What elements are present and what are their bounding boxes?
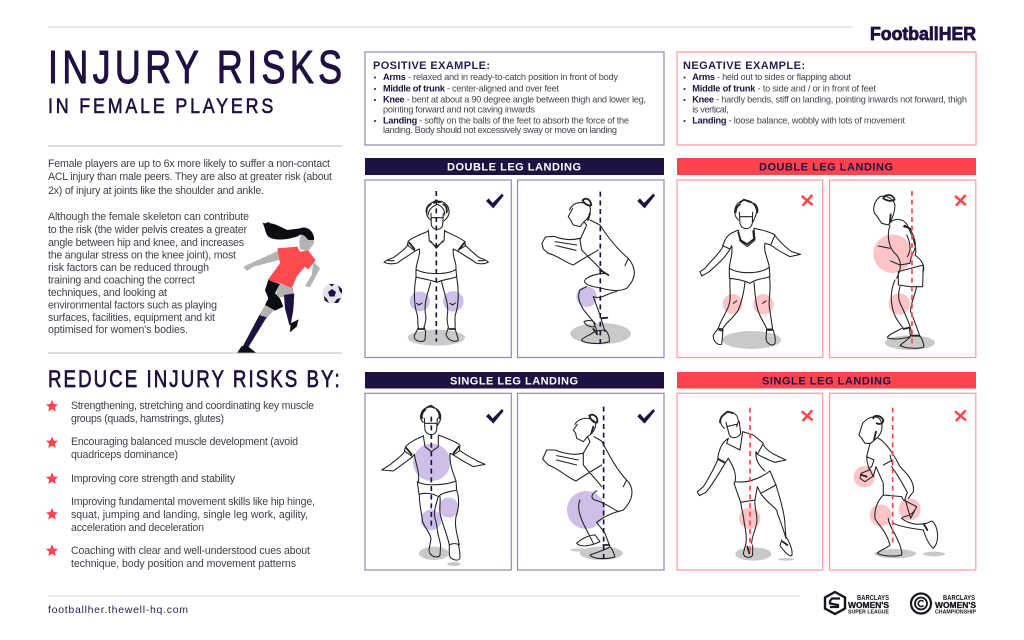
title: IN FEMALE PLAYERS — [48, 95, 273, 118]
logo: Barclays Women's Super League — [825, 592, 889, 616]
logo: Barclays Women's Championship: WOMEN'S — [935, 600, 976, 610]
heading: reduce injury risks: REDUCE INJURY RISKS BY: — [48, 366, 340, 393]
list: reduce injury risks: Improving fundamental movement skills like hip hinge, — [71, 496, 315, 508]
logo: Barclays Women's Championship — [911, 594, 976, 616]
title: INJURY RISKS — [48, 42, 342, 93]
title — [48, 42, 342, 118]
banner: double leg landing negative — [677, 158, 976, 175]
logo: Barclays Women's Super League: WOMEN'S — [848, 600, 889, 610]
intro text block: 2x) of injury at joints like the shoulder and ankle. — [48, 185, 264, 197]
icon: football — [322, 284, 342, 304]
logo: Barclays Women's Super League: BARCLAYS — [857, 595, 889, 602]
list: reduce injury risks — [46, 400, 315, 570]
list: reduce injury risks: Coaching with clear and well-understood cues about — [71, 545, 310, 557]
banner: double leg landing positive — [365, 158, 664, 175]
banner: single leg landing positive: SINGLE LEG LANDING — [450, 375, 578, 387]
panel: single leg front positive — [365, 393, 511, 570]
panel: positive example: Landing - softly on the balls of the feet to absorb the force of the — [383, 116, 629, 126]
list: reduce injury risks: groups (quads, hamstrings, glutes) — [71, 413, 224, 425]
list: reduce injury risks: Improving core strength and stability — [71, 473, 236, 485]
intro text block: to the risk (the wider pelvis creates a greater — [48, 224, 247, 236]
intro text block: training and coaching the correct — [48, 274, 195, 286]
panel: positive example — [365, 52, 664, 145]
list: reduce injury risks: quadriceps dominance) — [71, 449, 178, 461]
intro text block: Female players are up to 6x more likely to suffer a non-contact — [48, 158, 330, 170]
panel: double leg front negative — [677, 180, 823, 358]
list: reduce injury risks: technique, body position and movement patterns — [71, 558, 296, 570]
panel: double leg side positive — [518, 180, 664, 358]
banner: single leg landing negative — [677, 372, 976, 388]
illustration: female football player kicking — [237, 222, 320, 353]
intro text block: optimised for women's bodies. — [48, 324, 188, 336]
intro text block: surfaces, facilities, equipment and kit — [48, 312, 215, 324]
footer url: footballher.thewell-hq.com — [48, 604, 188, 616]
banner: single leg landing positive — [365, 372, 664, 388]
panel: single leg front negative — [677, 393, 823, 570]
panel: single leg side positive — [518, 393, 664, 570]
panel: negative example: Arms - held out to sides or flapping about — [692, 72, 851, 82]
intro text block: ACL injury than male peers. They are also at greater risk (about — [48, 171, 332, 183]
list: reduce injury risks: squat, jumping and landing, single leg work, agility, — [71, 509, 308, 521]
panel: positive example: Arms - relaxed and in ready-to-catch position in front of body — [383, 72, 618, 82]
intro text block: techniques, and looking at — [48, 287, 167, 299]
panel: double leg side negative — [830, 180, 976, 358]
banner: single leg landing negative: SINGLE LEG LANDING — [762, 375, 891, 387]
logo: Barclays Women's Super League: SUPER LEAGUE — [848, 610, 889, 616]
panel: positive example: Knee - bent at about a 90 degree angle between thigh and lower leg, — [383, 94, 646, 104]
intro text block: angle between hip and knee, and increases — [48, 237, 244, 249]
logo: Barclays Women's Championship: CHAMPIONSHIP — [935, 610, 976, 616]
intro text block: the angular stress on the knee joint), most — [48, 250, 236, 262]
intro text block — [48, 158, 332, 336]
panel: negative example: Landing - loose balance, wobbly with lots of movement — [692, 116, 905, 126]
panel: negative example: Middle of trunk - to side and / or in front of feet — [692, 83, 876, 93]
panel: double leg front positive — [365, 180, 511, 358]
panel: positive example: Middle of trunk - center-aligned and over feet — [383, 83, 559, 93]
list: reduce injury risks: Strengthening, stretching and coordinating key muscle — [71, 400, 314, 412]
panel: single leg side negative — [830, 393, 976, 570]
panel: negative example — [677, 52, 976, 145]
list: reduce injury risks: Encouraging balanced muscle development (avoid — [71, 436, 298, 448]
panel: negative example: NEGATIVE EXAMPLE: — [683, 60, 805, 72]
intro text block: environmental factors such as playing — [48, 300, 217, 312]
panel: positive example: landing. Body should not excessively sway or move on landing — [383, 125, 617, 135]
banner: double leg landing positive: DOUBLE LEG LANDING — [447, 161, 581, 173]
intro text block: risk factors can be reduced through — [48, 262, 209, 274]
panel: negative example: Knee - hardly bends, stiff on landing, pointing inwards not forward, thigh — [692, 94, 967, 104]
panel: positive example: POSITIVE EXAMPLE: — [373, 60, 490, 72]
logo: Barclays Women's Championship: BARCLAYS — [943, 595, 975, 602]
intro text block: Although the female skeleton can contribute — [48, 211, 249, 223]
banner: double leg landing negative: DOUBLE LEG LANDING — [759, 161, 893, 173]
list: reduce injury risks: acceleration and deceleration — [71, 522, 204, 534]
panel: positive example: pointing forward and not caving inwards — [383, 104, 535, 114]
logo: FootballHER: FootballHER — [870, 24, 976, 44]
panel: negative example: is vertical, — [692, 104, 729, 114]
